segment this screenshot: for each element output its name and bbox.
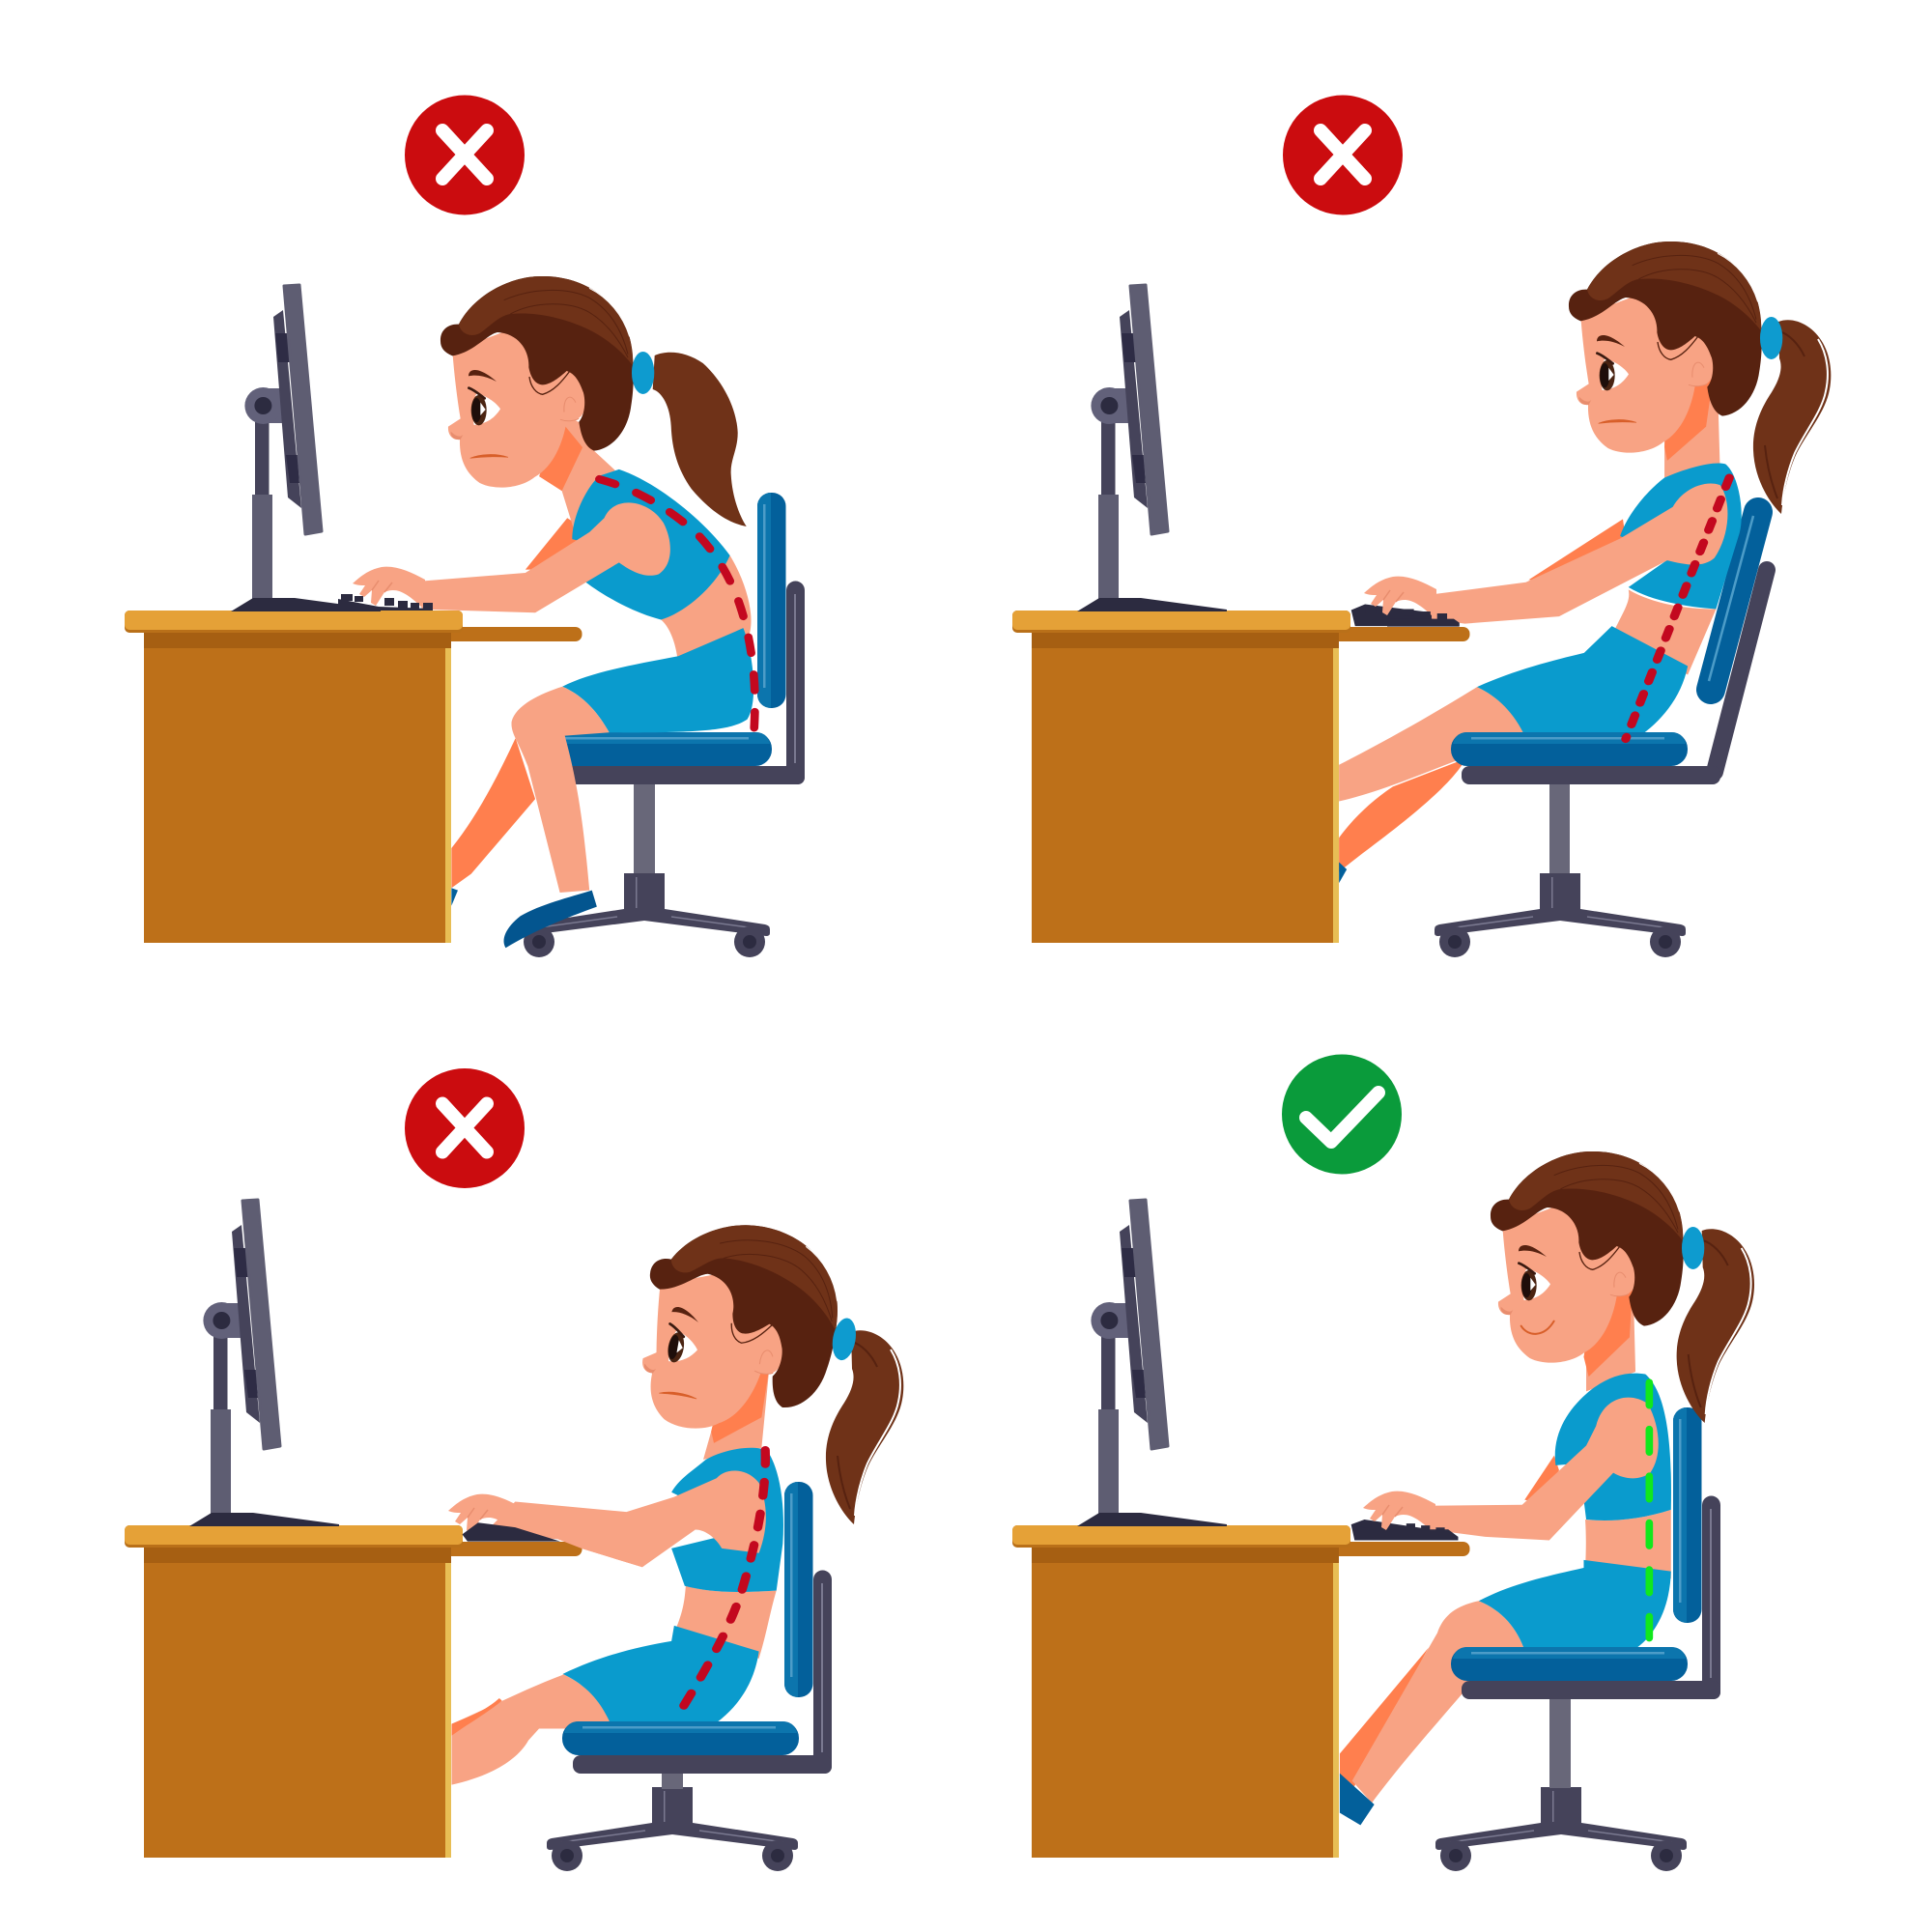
- desk: [125, 1525, 582, 1858]
- head: smiling face: [1491, 1151, 1704, 1363]
- ponytail: [1753, 320, 1831, 514]
- icon: wrong cross: [1283, 95, 1403, 214]
- figure body: [1339, 368, 1742, 883]
- figure body: [451, 1366, 783, 1785]
- head: worried face, tilted up: [625, 1208, 872, 1454]
- desk: [1012, 1525, 1470, 1858]
- panel: sitting too far from desk: [125, 1068, 903, 1871]
- ponytail: [1677, 1229, 1754, 1423]
- head: worried face: [1569, 242, 1782, 453]
- arm and keyboard: [1351, 484, 1727, 627]
- ponytail: [826, 1330, 903, 1524]
- reclined office chair back and base: [1435, 512, 1767, 957]
- computer monitor: [231, 285, 381, 611]
- smile: [1521, 1321, 1554, 1334]
- panel: leaning back: [1012, 95, 1831, 957]
- arm and keyboard: [1351, 1398, 1659, 1540]
- computer monitor: [189, 1200, 339, 1526]
- figure body: [451, 411, 753, 948]
- desk: [125, 611, 582, 943]
- head: worried face: [440, 276, 654, 488]
- lowered office chair back and base: [547, 1482, 832, 1871]
- seat cushion: [1451, 1647, 1720, 1699]
- figure body: [1340, 1278, 1671, 1825]
- panel: slouching forward: [125, 95, 805, 957]
- seat cushion: [562, 1721, 832, 1774]
- red dashed spine line: [1626, 477, 1729, 739]
- keyboard: [338, 594, 433, 611]
- green dashed spine line: [1642, 1382, 1657, 1638]
- arm and hand: [353, 502, 670, 612]
- ponytail: [653, 353, 747, 526]
- office chair: [519, 493, 805, 957]
- arm and keyboard: [448, 1470, 766, 1567]
- computer monitor: [1077, 285, 1227, 611]
- icon: correct check: [1282, 1055, 1402, 1175]
- icon: wrong cross: [405, 1068, 525, 1188]
- seat cushion: [1451, 732, 1720, 784]
- office chair back and base: [1435, 1407, 1720, 1871]
- red dashed spine line: [677, 1450, 765, 1717]
- red dashed spine line: [599, 479, 754, 741]
- panel: correct posture: [1012, 1055, 1754, 1871]
- icon: wrong cross: [405, 95, 525, 214]
- desk: [1012, 611, 1470, 943]
- computer monitor: [1077, 1200, 1227, 1526]
